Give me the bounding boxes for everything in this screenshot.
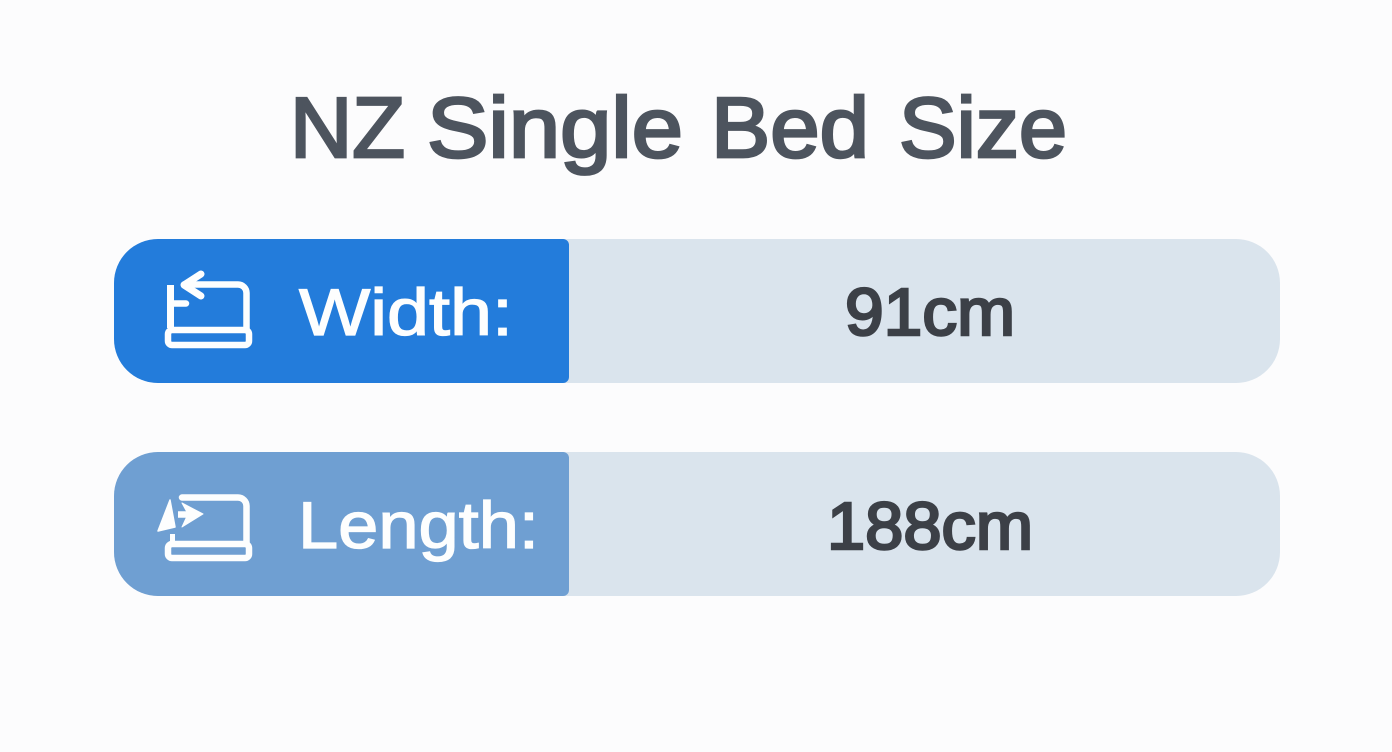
label block: width xyxy=(114,239,569,383)
icon: bed with left arrow xyxy=(168,274,249,345)
title: Size xyxy=(899,81,1067,176)
value: length: 188cm xyxy=(827,489,1033,564)
title: Bed xyxy=(711,81,869,176)
title xyxy=(290,81,1067,176)
icon: bed with right arrow xyxy=(158,498,249,558)
value track: length xyxy=(114,452,1280,596)
value: width: 91cm xyxy=(845,275,1015,350)
title: Single xyxy=(427,81,683,176)
title: NZ xyxy=(290,81,405,176)
panel: width row xyxy=(114,239,1280,383)
label: width: Width: xyxy=(299,275,513,349)
label block: length xyxy=(114,452,569,596)
label: length: Length: xyxy=(298,488,539,562)
value track: width xyxy=(114,239,1280,383)
panel: length row xyxy=(114,452,1280,596)
